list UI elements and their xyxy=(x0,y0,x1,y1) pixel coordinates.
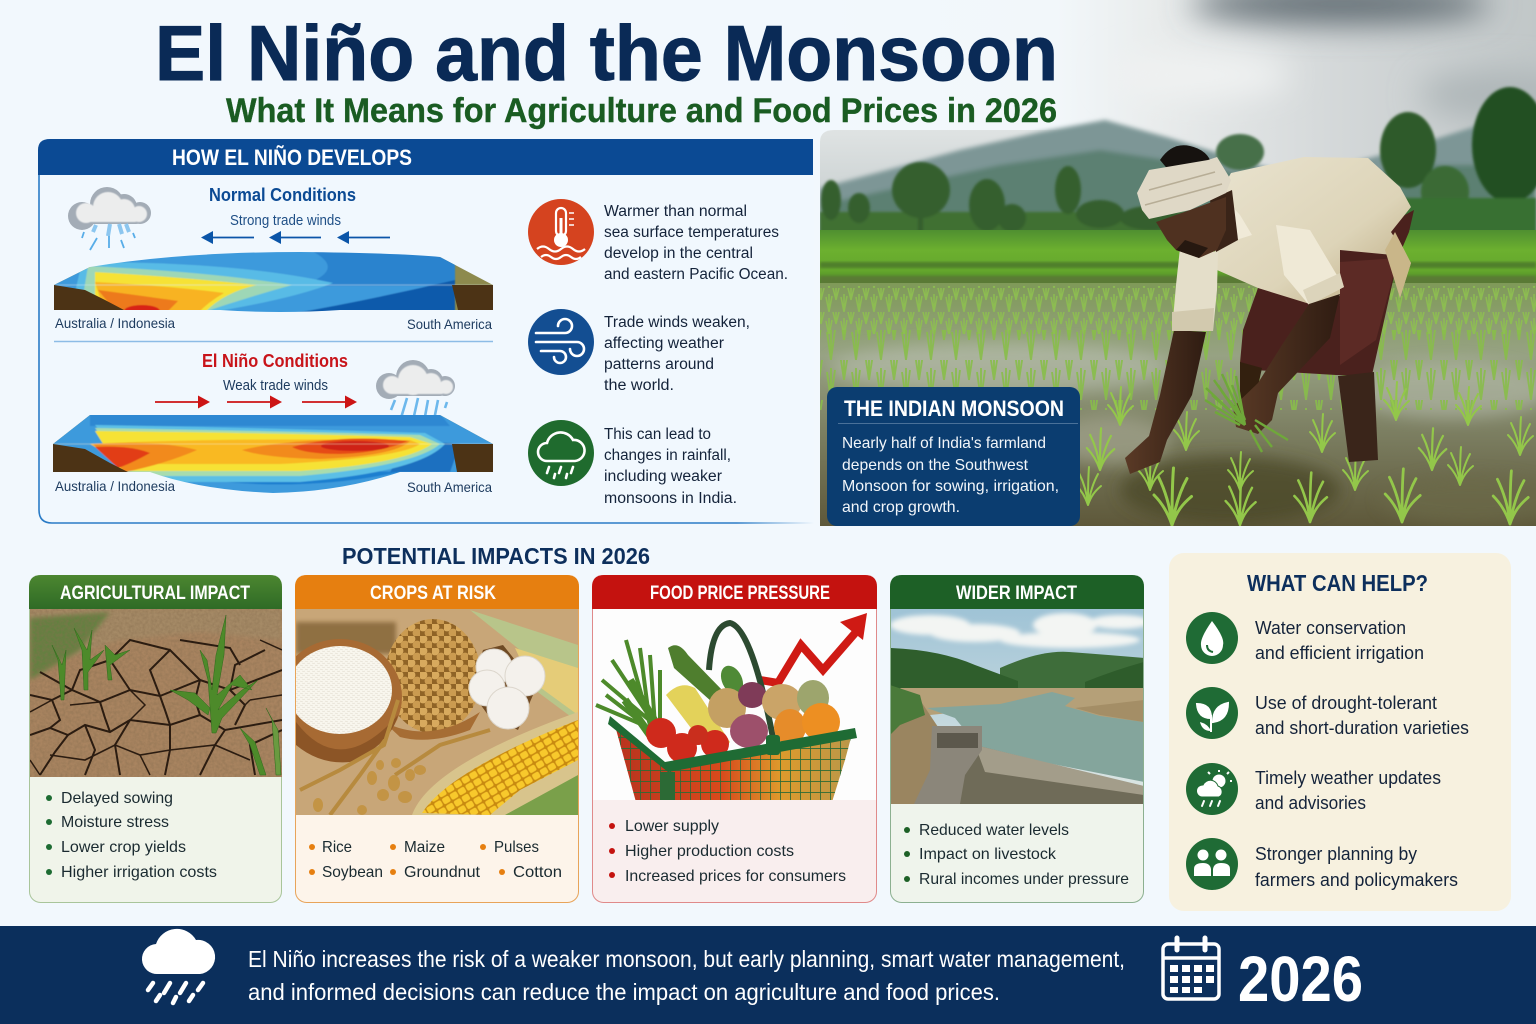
header xyxy=(592,575,877,609)
land xyxy=(53,415,130,472)
photo: cracked soil with maize seedlings xyxy=(29,609,283,777)
icon: thermometer and waves xyxy=(528,199,594,265)
heading: WHAT CAN HELP? xyxy=(1247,570,1428,596)
weak trade winds label: Weak trade winds xyxy=(223,378,328,394)
text: trade winds weaken: patterns around xyxy=(604,356,714,373)
icon: rain cloud, normal xyxy=(68,187,151,250)
shirt xyxy=(1210,157,1411,305)
icon: calendar xyxy=(1163,938,1219,999)
icon: rain cloud, El Niño xyxy=(376,360,455,425)
green field terraces xyxy=(820,230,1536,288)
bullet list: Moisture stress xyxy=(61,814,169,831)
crop list: Pulses xyxy=(494,839,539,856)
basket handle xyxy=(709,623,774,743)
text: warmer sea surface: develop in the central xyxy=(604,245,753,262)
sky xyxy=(820,0,1536,240)
rice seedlings in rows xyxy=(820,286,1536,525)
crop list: Soybean xyxy=(322,864,383,881)
label: South America: South America xyxy=(407,316,492,332)
footer message xyxy=(248,946,1125,1005)
text: drought-tolerant varieties: Use of drought-tolerant xyxy=(1255,693,1437,713)
legs xyxy=(1338,372,1378,462)
text: weather updates: Timely weather updates xyxy=(1255,768,1441,788)
text: drought-tolerant varieties xyxy=(1255,693,1469,738)
panel: what can help xyxy=(1169,553,1511,911)
year: 2026 xyxy=(1238,943,1363,1015)
icon: wind xyxy=(528,309,594,375)
header xyxy=(29,575,282,609)
arrows: strong trade winds westward xyxy=(201,231,390,244)
header xyxy=(295,575,579,609)
collar and chest xyxy=(1234,209,1252,240)
potatoes, onions, oranges, tomatoes xyxy=(646,680,840,763)
icon: white rain cloud xyxy=(142,929,215,1003)
text: stronger planning: Stronger planning by xyxy=(1255,844,1417,864)
text: water conservation: and efficient irrigation xyxy=(1255,643,1424,663)
photo: farmer planting rice in a flooded paddy xyxy=(820,0,1536,526)
icon: water drop xyxy=(1186,612,1238,664)
photo: low reservoir and dam xyxy=(890,609,1150,804)
callout: the Indian monsoon: and crop growth. xyxy=(842,499,960,516)
seedling bundle xyxy=(1205,374,1288,452)
heading: potential impacts: POTENTIAL IMPACTS IN 2026 xyxy=(342,543,650,569)
bullet list: Higher irrigation costs xyxy=(61,864,217,881)
turban xyxy=(1137,157,1231,219)
callout: the Indian monsoon: THE INDIAN MONSOON xyxy=(844,396,1064,421)
head xyxy=(1156,197,1226,258)
flooded paddy water xyxy=(820,283,1536,526)
header xyxy=(890,575,1144,609)
bullet list: Delayed sowing xyxy=(61,790,173,807)
callout: the Indian monsoon: depends on the Southwest xyxy=(842,457,1029,474)
crop list: Maize xyxy=(404,839,445,856)
panel heading: HOW EL NIÑO DEVELOPS xyxy=(172,145,412,170)
hair xyxy=(1160,145,1210,168)
crop list: Cotton xyxy=(513,864,562,881)
text: changes in rainfall: This can lead to xyxy=(604,426,711,443)
footer message: and informed decisions can reduce the impact on agriculture and food prices. xyxy=(248,979,1000,1005)
bullet list: Impact on livestock xyxy=(919,846,1057,863)
footer message: El Niño increases the risk of a weaker monsoon, but early planning, smart water management, xyxy=(248,946,1125,972)
panel: crops at risk xyxy=(278,575,579,902)
sleeves xyxy=(1172,248,1218,331)
text: weather updates xyxy=(1255,768,1441,813)
label: South America: South America xyxy=(407,479,492,495)
crop list: Rice xyxy=(322,839,352,856)
bullet list: Lower supply xyxy=(625,818,719,835)
callout: the Indian monsoon: Nearly half of India's farmland xyxy=(842,435,1046,452)
arrows: weak trade winds eastward xyxy=(155,396,357,408)
bullet list: Higher production costs xyxy=(625,843,794,860)
text: warmer sea surface: and eastern Pacific Ocean. xyxy=(604,266,788,283)
normal conditions heading: Normal Conditions xyxy=(209,184,356,205)
neck xyxy=(1210,190,1238,252)
text: changes in rainfall: monsoons in India. xyxy=(604,490,737,507)
tree line xyxy=(820,87,1536,238)
text: drought-tolerant varieties: and short-duration varieties xyxy=(1255,718,1469,738)
text: changes in rainfall: changes in rainfall, xyxy=(604,447,731,464)
panel: agricultural impact xyxy=(29,575,283,902)
bullet list: Rural incomes under pressure xyxy=(919,871,1129,888)
subtitle: What It Means for Agriculture and Food Prices in 2026 xyxy=(226,92,1057,130)
crop list: Groundnut xyxy=(404,864,481,881)
near arm xyxy=(1233,294,1340,434)
text: trade winds weaken: the world. xyxy=(604,377,674,394)
callout: the Indian monsoon xyxy=(827,387,1080,526)
label: Australia / Indonesia: Australia / Indonesia xyxy=(55,478,175,494)
text: trade winds weaken: Trade winds weaken, xyxy=(604,314,750,331)
bullet list: Lower crop yields xyxy=(61,839,186,856)
text: water conservation: Water conservation xyxy=(1255,618,1406,638)
text: trade winds weaken: affecting weather xyxy=(604,335,724,352)
rising price arrow xyxy=(760,613,867,683)
icon: sun, cloud and rain xyxy=(1186,763,1238,815)
El Niño conditions heading: El Niño Conditions xyxy=(202,350,348,371)
bullet list xyxy=(609,818,846,885)
zucchini xyxy=(668,645,724,702)
bullet list xyxy=(904,822,1129,888)
header: WIDER IMPACT xyxy=(956,583,1077,604)
cotton bolls xyxy=(469,645,545,730)
text: changes in rainfall xyxy=(604,426,737,507)
text: weather updates: and advisories xyxy=(1255,793,1366,813)
ocean cross-section: El Niño xyxy=(53,414,493,494)
text: stronger planning: farmers and policymakers xyxy=(1255,870,1458,890)
panel: wider impact xyxy=(890,575,1150,902)
photo: rice, soybean, cotton, maize xyxy=(278,609,579,816)
basket body xyxy=(616,730,851,800)
header: FOOD PRICE PRESSURE xyxy=(650,583,830,604)
icon: seedling xyxy=(1186,687,1238,739)
strong trade winds label: Strong trade winds xyxy=(230,213,341,229)
far arm and hand xyxy=(1125,330,1206,474)
main title: El Niño and the Monsoon xyxy=(155,9,1058,97)
photo: vegetable basket with rising arrow xyxy=(592,609,877,802)
panel heading xyxy=(38,139,813,175)
trousers xyxy=(1240,210,1414,375)
text: warmer sea surface: sea surface temperatures xyxy=(604,224,779,241)
label: Australia / Indonesia: Australia / Indonesia xyxy=(55,315,175,331)
text: water conservation xyxy=(1255,618,1424,663)
squash xyxy=(666,685,730,744)
ocean cross-section: normal xyxy=(54,252,493,312)
text: warmer sea surface: Warmer than normal xyxy=(604,203,747,220)
icon: rain cloud xyxy=(528,420,594,486)
bullet list: Reduced water levels xyxy=(919,822,1069,839)
header: AGRICULTURAL IMPACT xyxy=(60,583,250,604)
text: stronger planning xyxy=(1255,844,1458,890)
crop list xyxy=(309,839,562,881)
text: warmer sea surface xyxy=(604,203,788,283)
bullet list: Increased prices for consumers xyxy=(625,868,846,885)
text: changes in rainfall: including weaker xyxy=(604,468,722,485)
panel: food price pressure xyxy=(592,575,877,902)
text: trade winds weaken xyxy=(604,314,750,394)
header: CROPS AT RISK xyxy=(370,583,496,604)
farmer xyxy=(1125,145,1414,474)
bullet list xyxy=(46,790,217,881)
land xyxy=(54,267,130,310)
icon: people xyxy=(1186,838,1238,890)
greens xyxy=(596,640,660,735)
panel: how El Niño develops xyxy=(38,139,814,523)
footer banner xyxy=(0,926,1536,1024)
mountains xyxy=(820,120,1536,240)
callout: the Indian monsoon: Monsoon for sowing, irrigation, xyxy=(842,478,1059,495)
